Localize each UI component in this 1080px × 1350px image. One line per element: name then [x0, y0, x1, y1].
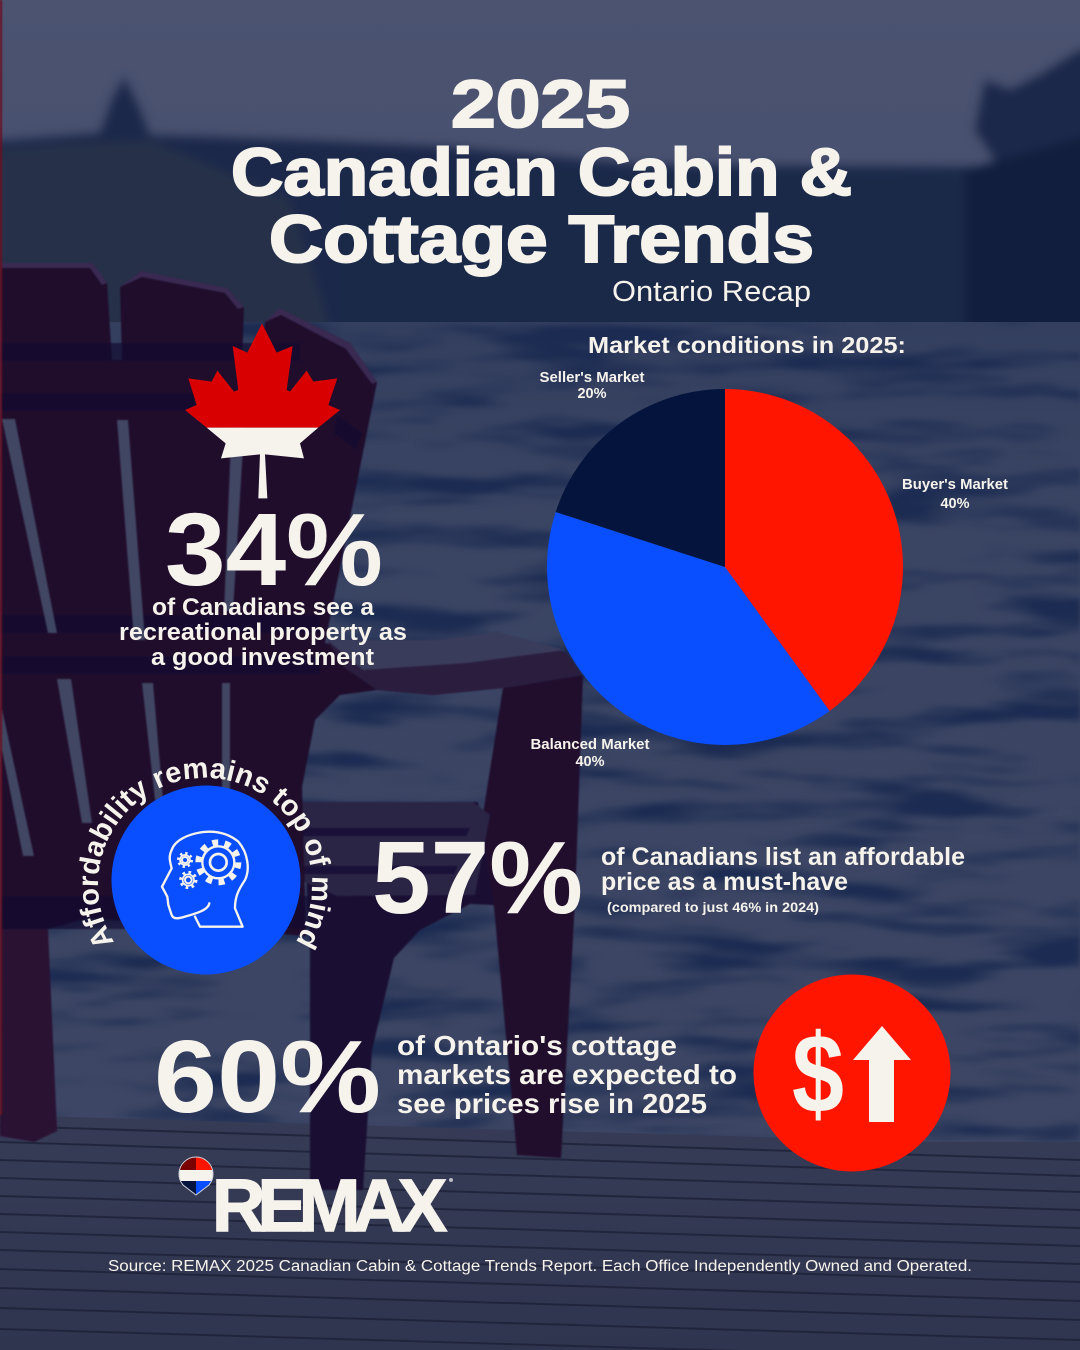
stat: 60%: 60%	[154, 1019, 381, 1134]
stat: 57%: 57%	[372, 820, 583, 935]
label: seller's market: 20%	[577, 386, 607, 402]
text: recreational property: of Canadians see a	[152, 594, 375, 621]
text: recreational property: recreational property as	[119, 619, 407, 646]
label: buyer's market: 40%	[940, 496, 970, 512]
label: balanced market: Balanced Market	[530, 737, 650, 753]
label: seller's market: Seller's Market	[540, 370, 645, 386]
text: prices rise: markets are expected to	[397, 1059, 737, 1090]
slice: buyer's market 40%	[725, 389, 903, 711]
text: affordable price: price as a must-have	[601, 868, 848, 896]
logo: REMAX: REMAX	[212, 1164, 447, 1247]
label: buyer's market: Buyer's Market	[902, 477, 1008, 493]
icon: head with gears	[162, 832, 248, 927]
red circle with dollar and arrow icon	[754, 974, 950, 1172]
icon: up arrow	[853, 1026, 911, 1122]
icon: balloon pin	[178, 1155, 214, 1197]
title	[231, 67, 852, 277]
text: prices rise: see prices rise in 2025	[397, 1088, 707, 1119]
text: prices rise	[397, 1030, 737, 1119]
slice: balanced market 40%	[547, 512, 830, 745]
slice: seller's market 20%	[556, 389, 725, 567]
text: prices rise: of Ontario's cottage	[397, 1030, 677, 1061]
title: Cottage Trends	[269, 202, 814, 277]
text: recreational property: a good investment	[151, 644, 374, 671]
stat: 34%: 34%	[165, 492, 383, 607]
text: affordable price: (compared to just 46% in 2024)	[607, 900, 819, 915]
label: balanced market: 40%	[575, 754, 605, 770]
subtitle: Ontario Recap: Ontario Recap	[612, 276, 811, 308]
source note: Source: REMAX 2025 Canadian Cabin & Cottage Trends Report. Each Office Independently Owned and Operated.	[108, 1258, 972, 1275]
curved text: affordability: Affordability remains top of mind	[79, 760, 332, 974]
pie chart heading: Market conditions in 2025:	[588, 332, 906, 358]
label: buyer's market	[902, 477, 1008, 512]
text: affordable price	[601, 843, 965, 915]
label: seller's market	[540, 370, 645, 402]
icon: maple leaf	[185, 323, 340, 498]
text: affordable price: of Canadians list an affordable	[601, 843, 965, 871]
label: balanced market	[530, 737, 650, 770]
logo: REMAX	[178, 1156, 453, 1232]
text: recreational property	[119, 594, 407, 671]
adirondack chair silhouette	[0, 0, 583, 1190]
blue circle with head icon	[112, 786, 300, 974]
icon: dollar sign: $	[792, 1011, 844, 1136]
title: 2025	[451, 67, 630, 142]
title: Canadian Cabin &	[231, 135, 852, 210]
pie chart: market conditions	[547, 389, 903, 745]
